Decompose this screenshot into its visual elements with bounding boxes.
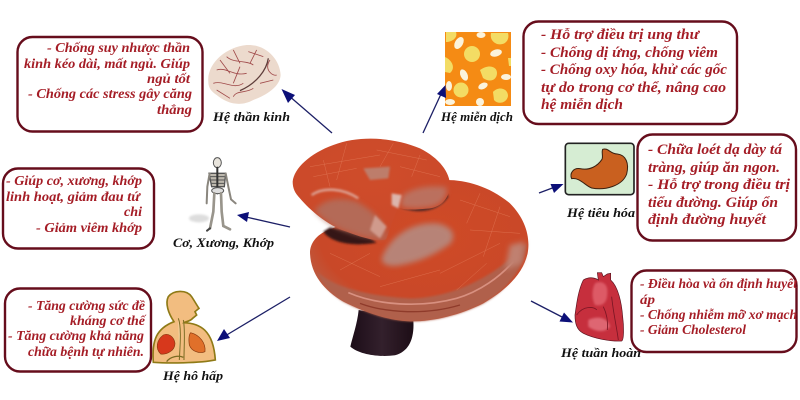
nervous system text: kinh kéo dài, mất ngủ. Giúp xyxy=(24,57,190,72)
icon: skeleton xyxy=(189,158,236,231)
nervous system text: - Chống các stress gây căng xyxy=(28,87,192,102)
circulatory box xyxy=(632,270,796,352)
arrow: to immune cells xyxy=(423,85,446,133)
bones text: chi xyxy=(124,205,142,220)
circulatory text: áp xyxy=(640,293,655,308)
respiratory box xyxy=(5,288,151,372)
icon: stomach xyxy=(565,143,634,195)
label: respiratory: Hệ hô hấp xyxy=(162,368,224,383)
label: digestive system: Hệ tiêu hóa xyxy=(566,205,636,220)
circulatory text xyxy=(640,277,798,338)
mushroom stem xyxy=(350,310,413,356)
immune text: - Chống oxy hóa, khử các gốc xyxy=(541,62,727,78)
respiratory text: kháng cơ thế xyxy=(70,314,147,329)
immune text xyxy=(541,27,727,113)
nervous system text: - Chống suy nhược thần xyxy=(47,41,190,56)
panel: immune system xyxy=(524,22,737,124)
panel: bones and joints xyxy=(3,168,154,248)
digestive text: định đường huyết xyxy=(648,212,767,228)
respiratory text: - Tăng cường sức đề xyxy=(28,299,146,314)
lower cap xyxy=(310,180,528,321)
icon: immune cells xyxy=(445,32,511,106)
bones text xyxy=(6,174,142,236)
panel: circulatory system xyxy=(632,270,798,352)
bones text: - Giúp cơ, xương, khớp xyxy=(6,174,142,189)
digestive box xyxy=(638,134,796,240)
arrow: to heart xyxy=(531,301,573,322)
immune text: - Hỗ trợ điều trị ung thư xyxy=(541,27,700,43)
digestive text xyxy=(648,142,791,228)
respiratory text: chữa bệnh tự nhiên. xyxy=(28,345,144,360)
nervous system box xyxy=(18,37,202,132)
panel: nervous system xyxy=(18,37,202,132)
lower cap rim xyxy=(317,243,526,321)
nervous system text: ngủ tốt xyxy=(147,72,191,87)
nervous system text xyxy=(24,41,192,118)
shadow under upper cap xyxy=(323,193,448,244)
panel: respiratory xyxy=(5,288,151,372)
digestive text: tràng, giúp ăn ngon. xyxy=(648,160,780,176)
label: bones and joints: Cơ, Xương, Khớp xyxy=(173,235,275,250)
digestive text: - Hỗ trợ trong điều trị xyxy=(648,177,791,193)
immune text: - Chống dị ứng, chống viêm xyxy=(541,45,718,61)
respiratory text xyxy=(8,299,147,360)
arrow: to lungs xyxy=(217,297,290,341)
label: circulatory system: Hệ tuần hoàn xyxy=(560,345,641,360)
bones box xyxy=(3,168,154,248)
icon: brain xyxy=(208,45,281,104)
bones text: - Giảm viêm khớp xyxy=(36,221,142,236)
arrow: to skeleton xyxy=(237,212,290,227)
circulatory text: - Chống nhiễm mỡ xơ mạch xyxy=(640,308,797,323)
nervous system text: thẳng xyxy=(157,103,192,118)
label: nervous system: Hệ thần kinh xyxy=(212,109,290,124)
icon: person with lungs xyxy=(153,291,215,363)
respiratory text: - Tăng cường khả năng xyxy=(8,329,144,344)
cap texture lines xyxy=(310,143,520,290)
arrow: to stomach xyxy=(539,184,564,193)
immune box xyxy=(524,22,737,124)
upper cap pale patches xyxy=(315,199,385,238)
arrow: to brain xyxy=(282,89,332,133)
circulatory text: - Giảm Cholesterol xyxy=(640,323,746,338)
digestive text: - Chữa loét dạ dày tá xyxy=(648,142,783,158)
panel: digestive system xyxy=(638,134,796,240)
mushroom xyxy=(293,139,528,356)
immune text: hệ miễn dịch xyxy=(541,97,623,113)
digestive text: tiểu đường. Giúp ổn xyxy=(648,195,778,211)
upper cap xyxy=(293,139,450,240)
icon: heart xyxy=(575,273,624,341)
immune text: tự do trong cơ thể, nâng cao xyxy=(541,80,726,96)
circulatory text: - Điều hòa và ổn định huyết xyxy=(640,277,798,292)
label: immune system: Hệ miễn dịch xyxy=(440,109,513,124)
bones text: linh hoạt, giảm đau tứ xyxy=(6,190,142,205)
lower cap pale patch xyxy=(382,223,453,266)
